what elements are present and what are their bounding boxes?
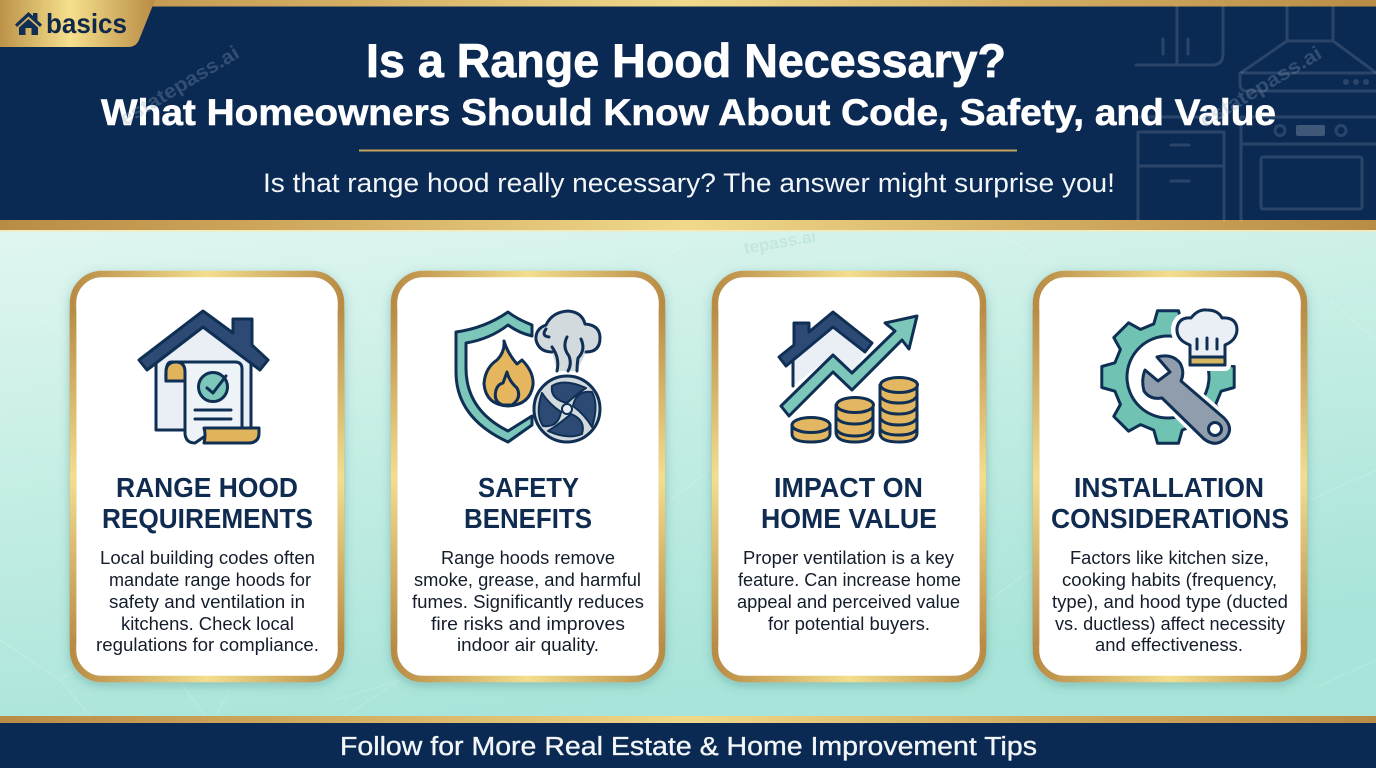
body text: mandate range hoods for xyxy=(109,570,311,590)
body text xyxy=(737,548,961,634)
body text: kitchens. Check local xyxy=(121,614,294,634)
body text: fumes. Significantly reduces xyxy=(412,592,644,612)
logo wordmark: basics xyxy=(46,8,127,39)
body text: safety and ventilation in xyxy=(109,592,305,612)
header band xyxy=(0,0,1376,232)
heading xyxy=(1051,472,1289,534)
watermark right: estatepass.ai xyxy=(1196,42,1326,132)
gold divider xyxy=(359,150,1017,152)
heading xyxy=(761,472,937,534)
icon: house with code document xyxy=(139,311,268,443)
panel background: tepass.ai xyxy=(742,227,817,258)
heading: BENEFITS xyxy=(464,503,592,534)
panel: range hood requirements xyxy=(70,274,344,679)
icon: house, rising arrow and coins xyxy=(779,312,918,442)
body text: Proper ventilation is a key xyxy=(743,548,954,568)
heading xyxy=(102,472,313,534)
heading: REQUIREMENTS xyxy=(102,503,313,534)
heading: SAFETY xyxy=(478,472,579,503)
watermark left: estatepass.ai xyxy=(116,42,243,130)
heading: HOME VALUE xyxy=(761,503,937,534)
body text: Factors like kitchen size, xyxy=(1070,548,1269,568)
body text xyxy=(412,548,644,655)
body text: appeal and perceived value xyxy=(737,592,960,612)
title: Is a Range Hood Necessary? xyxy=(366,34,1006,87)
body text: for potential buyers. xyxy=(768,614,930,634)
body text xyxy=(96,548,319,655)
icon: house xyxy=(15,12,42,35)
body text: and effectiveness. xyxy=(1095,635,1243,655)
body text: type), and hood type (ducted xyxy=(1052,592,1288,612)
body text: feature. Can increase home xyxy=(738,570,961,590)
footer text: Follow for More Real Estate & Home Improvement Tips xyxy=(340,733,1037,761)
body text: cooking habits (frequency, xyxy=(1062,570,1277,590)
body text: indoor air quality. xyxy=(457,635,599,655)
heading: INSTALLATION xyxy=(1074,472,1264,503)
panel: safety benefits xyxy=(391,274,665,679)
body text: smoke, grease, and harmful xyxy=(414,570,641,590)
heading xyxy=(464,472,592,534)
subtitle: What Homeowners Should Know About Code, Safety, and Value xyxy=(101,92,1276,133)
body text: regulations for compliance. xyxy=(96,635,319,655)
panel: installation considerations xyxy=(1033,274,1307,679)
icon: gear, wrench and chef hat xyxy=(1102,310,1245,443)
body text: Local building codes often xyxy=(100,548,315,568)
heading: RANGE HOOD xyxy=(116,472,298,503)
body text: fire risks and improves xyxy=(431,614,625,634)
heading: CONSIDERATIONS xyxy=(1051,503,1289,534)
panel: impact on home value xyxy=(712,274,986,679)
tagline: Is that range hood really necessary? The answer might surprise you! xyxy=(263,168,1115,198)
logo tab: basics xyxy=(0,0,155,47)
body text xyxy=(1052,548,1288,655)
heading: IMPACT ON xyxy=(774,472,923,503)
kitchen line art watermark xyxy=(1136,7,1376,220)
icon: shield, flame, smoke and fan xyxy=(456,311,600,442)
footer band xyxy=(0,716,1376,768)
body text: vs. ductless) affect necessity xyxy=(1055,614,1285,634)
body text: Range hoods remove xyxy=(441,548,615,568)
